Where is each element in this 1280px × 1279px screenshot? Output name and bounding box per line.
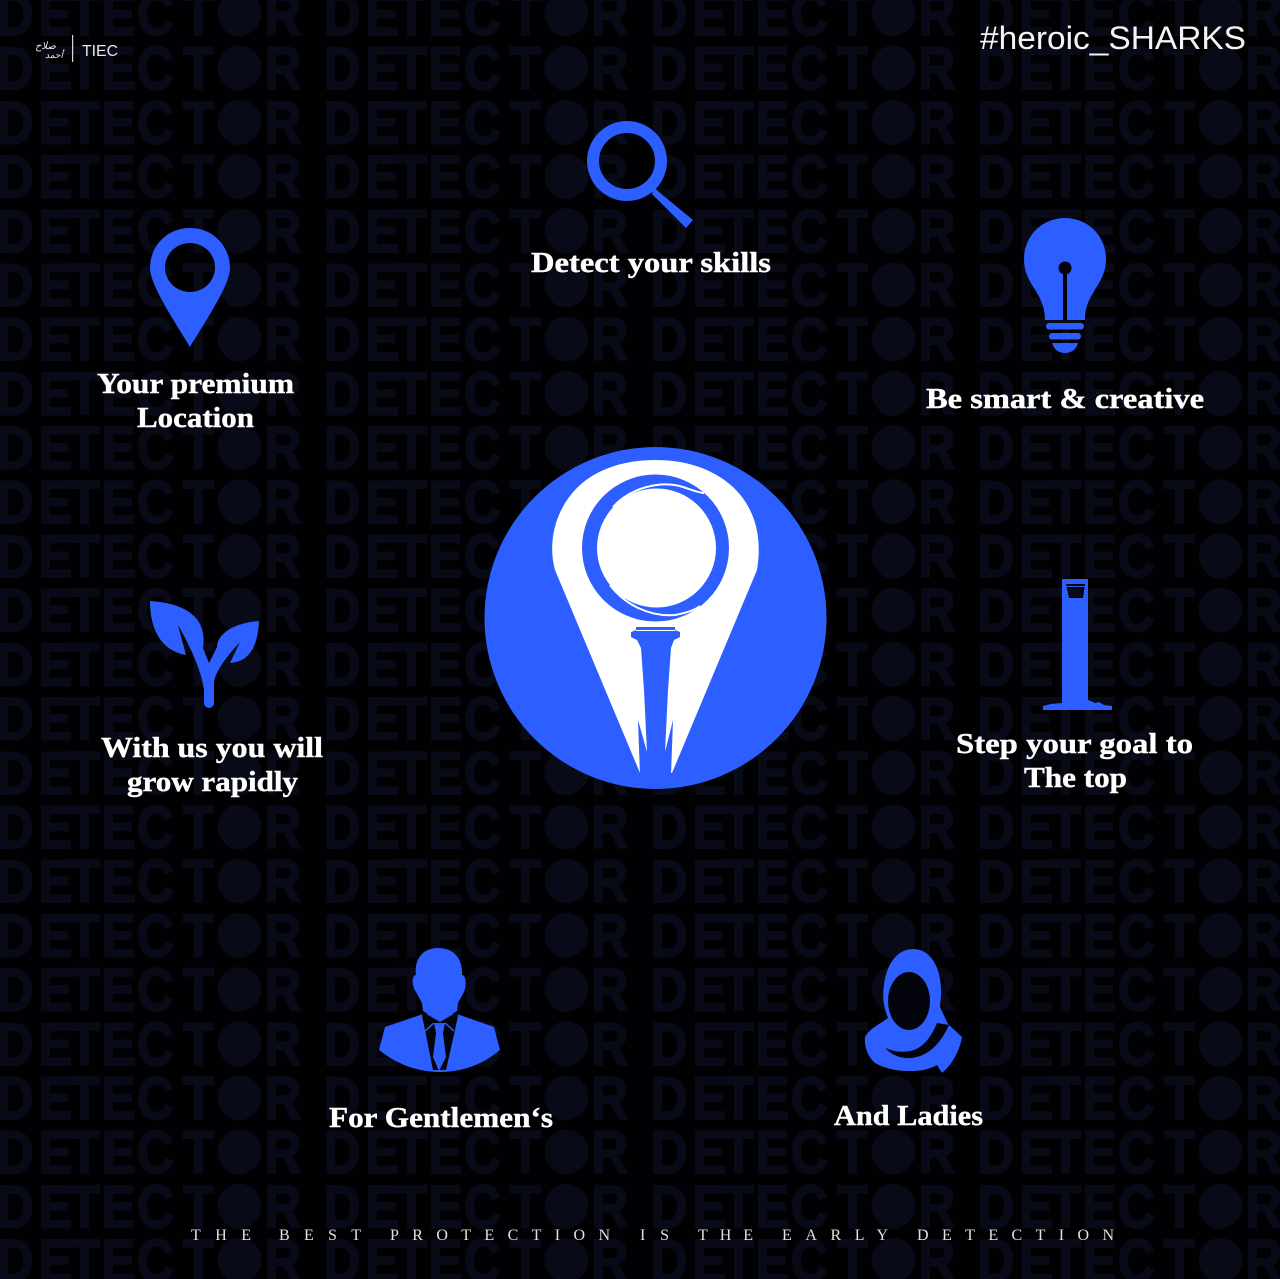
label: for gentlemen: For Gentlemen‘s (329, 1102, 553, 1134)
central badge: pin with magnifier (484, 447, 826, 789)
text: DETECTOR DETECTOR DETECTOR DETECTOR (0, 632, 1280, 698)
text: DETECTOR DETECTOR DETECTOR DETECTOR (0, 903, 1280, 969)
label: your premium location: Your premium (97, 368, 294, 400)
text: DETECTOR DETECTOR DETECTOR DETECTOR (0, 957, 1280, 1024)
text: DETECTOR DETECTOR DETECTOR DETECTOR (0, 740, 1280, 807)
label: detect your skills: Detect your skills (531, 247, 771, 279)
label: step your goal to the top: The top (1024, 762, 1127, 794)
text: DETECTOR DETECTOR DETECTOR DETECTOR (0, 198, 1280, 265)
text: DETECTOR DETECTOR DETECTOR DETECTOR (0, 1119, 1280, 1186)
text: DETECTOR DETECTOR DETECTOR DETECTOR (0, 415, 1280, 482)
tagline: THE (191, 1227, 251, 1244)
tagline: PROTECTION (390, 1227, 610, 1244)
label: your premium location: Location (137, 402, 254, 434)
icon: sprout (150, 601, 259, 708)
icon: lady in hijab (865, 949, 962, 1073)
label: your premium location (97, 368, 294, 434)
hashtag: #heroic_SHARKS (980, 20, 1246, 56)
text: DETECTOR DETECTOR DETECTOR DETECTOR (0, 361, 1280, 427)
icon: tower (1043, 579, 1112, 710)
tagline: DETECTION (917, 1227, 1114, 1244)
text: DETECTOR DETECTOR DETECTOR DETECTOR (0, 469, 1280, 536)
logo: author signature and TIEC: صلاح (35, 41, 56, 52)
icon: gentleman (379, 948, 500, 1072)
text: DETECTOR DETECTOR DETECTOR DETECTOR (0, 1011, 1280, 1078)
text: DETECTOR DETECTOR DETECTOR DETECTOR (0, 90, 1280, 156)
text: DETECTOR DETECTOR DETECTOR DETECTOR (0, 1065, 1280, 1132)
tagline (191, 1227, 1114, 1244)
text: DETECTOR DETECTOR DETECTOR DETECTOR (0, 686, 1280, 753)
icon: light bulb (1024, 218, 1106, 353)
tagline: IS (640, 1227, 669, 1244)
label: step your goal to the top (956, 728, 1193, 794)
logo: author signature and TIEC (35, 35, 118, 62)
label: with us you will grow rapidly: grow rapidly (127, 766, 299, 798)
text: DETECTOR DETECTOR DETECTOR DETECTOR (0, 577, 1280, 644)
text: DETECTOR DETECTOR DETECTOR DETECTOR (0, 144, 1280, 211)
icon: location pin (150, 228, 230, 347)
label: be smart and creative: Be smart & creative (926, 383, 1204, 415)
logo: author signature and TIEC: أحمد (45, 49, 65, 61)
text: DETECTOR DETECTOR DETECTOR DETECTOR (0, 1174, 1280, 1240)
label: and ladies: And Ladies (834, 1100, 983, 1132)
logo: author signature and TIEC: TIEC (82, 43, 118, 60)
text: DETECTOR DETECTOR DETECTOR DETECTOR (0, 794, 1280, 861)
text: DETECTOR DETECTOR DETECTOR DETECTOR (0, 306, 1280, 373)
text: DETECTOR DETECTOR DETECTOR DETECTOR (0, 35, 1280, 102)
icon: magnifying glass (593, 127, 693, 228)
label: with us you will grow rapidly: With us you will (101, 732, 323, 764)
text: DETECTOR DETECTOR DETECTOR DETECTOR (0, 523, 1280, 590)
tagline: EARLY (782, 1227, 888, 1244)
label: with us you will grow rapidly (101, 732, 323, 798)
text: DETECTOR DETECTOR DETECTOR DETECTOR (0, 252, 1280, 319)
label: step your goal to the top: Step your goal to (956, 728, 1193, 760)
tagline: THE (698, 1227, 753, 1244)
tagline: BEST (279, 1227, 361, 1244)
text: DETECTOR DETECTOR DETECTOR DETECTOR (0, 848, 1280, 915)
